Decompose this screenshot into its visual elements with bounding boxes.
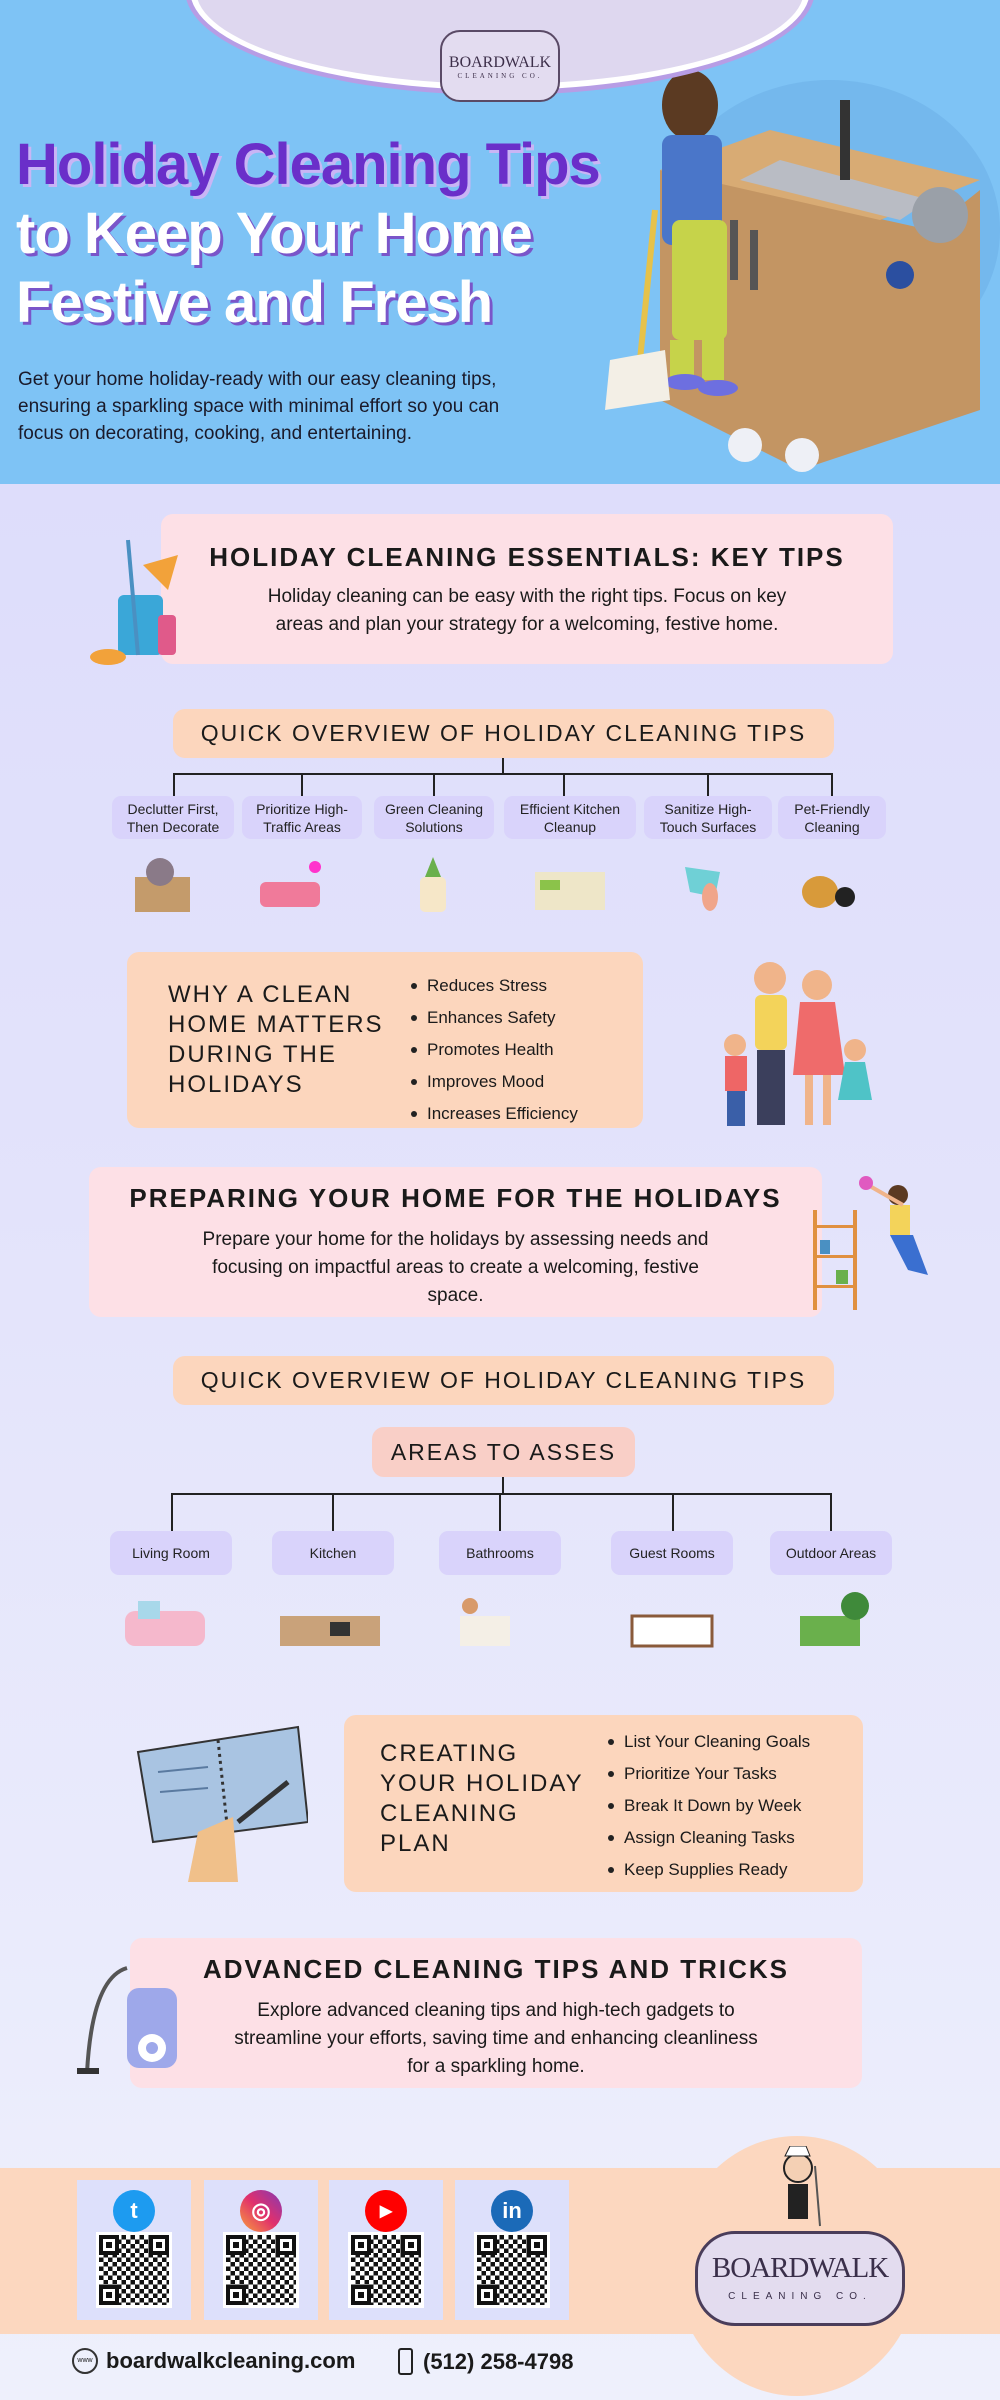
pill: quick overview 1: QUICK OVERVIEW OF HOLIDAY CLEANING TIPS [201, 720, 806, 746]
area pills [110, 1531, 892, 1575]
intro text: ensuring a sparkling space with minimal effort so you can [18, 396, 499, 417]
text: Prioritize High- [256, 800, 348, 816]
bullets: plan [608, 1732, 810, 1879]
heading: plan: YOUR HOLIDAY [380, 1770, 584, 1797]
panel: essentials [161, 514, 893, 664]
heading: why: DURING THE [168, 1041, 337, 1068]
text: essentials: areas and plan your strategy for a welcoming, festive home. [276, 614, 778, 635]
heading: why [168, 981, 384, 1098]
logo badge footer [695, 2231, 905, 2326]
contact: website: www [77, 2357, 93, 2364]
header illustration: woman washing dishes [605, 72, 1000, 472]
social card: linkedin [455, 2180, 569, 2320]
pill: quick overview 2 [173, 1356, 834, 1405]
text: Touch Surfaces [660, 818, 756, 834]
illustration: shelf and woman [813, 1176, 928, 1310]
bullets: why: Increases Efficiency [427, 1104, 578, 1123]
text: Cleaning [804, 818, 860, 834]
logo badge footer: BOARDWALK [712, 2252, 888, 2284]
footer logo circle [675, 2136, 919, 2396]
panel: why a clean home matters [127, 952, 643, 1128]
text: Outdoor Areas [786, 1545, 876, 1561]
pill: quick overview 2: QUICK OVERVIEW OF HOLIDAY CLEANING TIPS [201, 1367, 806, 1393]
title: Holiday Cleaning Tips [16, 132, 600, 197]
text: Living Room [132, 1545, 210, 1561]
text: Sanitize High- [664, 800, 752, 816]
text: essentials [268, 586, 786, 635]
text: advanced: streamline your efforts, saving time and enhancing cleanliness [234, 2028, 758, 2049]
panel: preparing your home [89, 1167, 822, 1317]
bullets: why: Improves Mood [427, 1072, 544, 1091]
social card: youtube [329, 2180, 443, 2320]
heading: preparing: PREPARING YOUR HOME FOR THE HOLIDAYS [129, 1183, 782, 1213]
social card: twitter: t [130, 2198, 138, 2223]
header background [0, 0, 1000, 484]
logo badge footer: CLEANING CO. [728, 2291, 872, 2302]
contact: website: boardwalkcleaning.com [106, 2348, 355, 2373]
heading: why: HOME MATTERS [168, 1011, 384, 1038]
bullets: plan: Keep Supplies Ready [624, 1860, 788, 1879]
text: preparing: focusing on impactful areas to create a welcoming, festive [212, 1257, 699, 1278]
pill: areas to assess: AREAS TO ASSES [391, 1439, 616, 1465]
contact: phone: (512) 258-4798 [423, 2348, 573, 2374]
intro text: Get your home holiday-ready with our easy cleaning tips, [18, 369, 496, 390]
tip icons [135, 857, 855, 912]
illustration: notebook and hand [136, 1726, 308, 1882]
social card: youtube: ▶ [380, 2203, 392, 2220]
bullets: plan: List Your Cleaning Goals [624, 1732, 810, 1751]
text: Green Cleaning [385, 800, 483, 816]
title: Festive and Fresh [16, 270, 492, 335]
tip pills [112, 796, 886, 839]
text: Kitchen [310, 1545, 356, 1561]
heading: essentials: HOLIDAY CLEANING ESSENTIALS: KEY TIPS [209, 542, 845, 572]
text: Solutions [405, 818, 463, 834]
text: Efficient Kitchen [520, 800, 620, 816]
illustration: family [724, 962, 872, 1126]
text: Traffic Areas [263, 818, 341, 834]
panel: advanced tips [130, 1938, 862, 2088]
intro text: focus on decorating, cooking, and entertaining. [18, 423, 412, 444]
text: Then Decorate [127, 818, 219, 834]
social card: instagram [204, 2180, 318, 2320]
area icons [125, 1592, 869, 1648]
text: Bathrooms [466, 1545, 534, 1561]
text: preparing [203, 1229, 708, 1306]
icon: vacuum [77, 1966, 177, 2074]
intro text [18, 369, 499, 444]
heading: why: WHY A CLEAN [168, 981, 352, 1008]
text: advanced [234, 2000, 758, 2077]
social card: twitter [77, 2180, 191, 2320]
logo badge top: CLEANING CO. [458, 72, 542, 80]
bullets: plan: Break It Down by Week [624, 1796, 801, 1815]
logo badge top [440, 30, 560, 102]
social card: instagram: ◎ [251, 2198, 271, 2223]
text: advanced: for a sparkling home. [407, 2056, 585, 2077]
pill: quick overview 1 [173, 709, 834, 758]
logo plaque top [190, 0, 810, 90]
bullets: why [411, 976, 578, 1123]
text: Cleanup [544, 818, 596, 834]
logo badge top: BOARDWALK [449, 54, 551, 71]
bullets: why: Enhances Safety [427, 1008, 556, 1027]
text: Pet-Friendly [794, 800, 870, 816]
text: essentials: Holiday cleaning can be easy with the right tips. Focus on key [268, 586, 786, 607]
bullets: plan: Prioritize Your Tasks [624, 1764, 777, 1783]
bullets: why: Reduces Stress [427, 976, 547, 995]
panel: holiday cleaning plan [344, 1715, 863, 1892]
logo mascot [783, 2146, 821, 2226]
social card: linkedin: in [502, 2198, 522, 2223]
text: preparing: Prepare your home for the holidays by assessing needs and [203, 1229, 708, 1250]
bullets: why: Promotes Health [427, 1040, 554, 1059]
title: to Keep Your Home [16, 201, 532, 266]
heading: advanced: ADVANCED CLEANING TIPS AND TRICKS [203, 1954, 789, 1984]
text: preparing: space. [428, 1285, 483, 1306]
tree lines 1 [173, 758, 833, 796]
text: Declutter First, [127, 800, 218, 816]
text: Guest Rooms [629, 1545, 715, 1561]
footer band [0, 2168, 1000, 2334]
icon: cleaning bucket [90, 540, 178, 665]
heading: plan: CREATING [380, 1740, 518, 1767]
bullets: plan: Assign Cleaning Tasks [624, 1828, 795, 1847]
heading: why: HOLIDAYS [168, 1071, 304, 1098]
pill: areas to assess [372, 1427, 635, 1477]
tree lines 2 [171, 1477, 832, 1531]
text: advanced: Explore advanced cleaning tips and high-tech gadgets to [257, 2000, 735, 2021]
heading: plan [380, 1740, 584, 1857]
heading: plan: PLAN [380, 1830, 451, 1857]
heading: plan: CLEANING [380, 1800, 519, 1827]
title [16, 132, 602, 335]
